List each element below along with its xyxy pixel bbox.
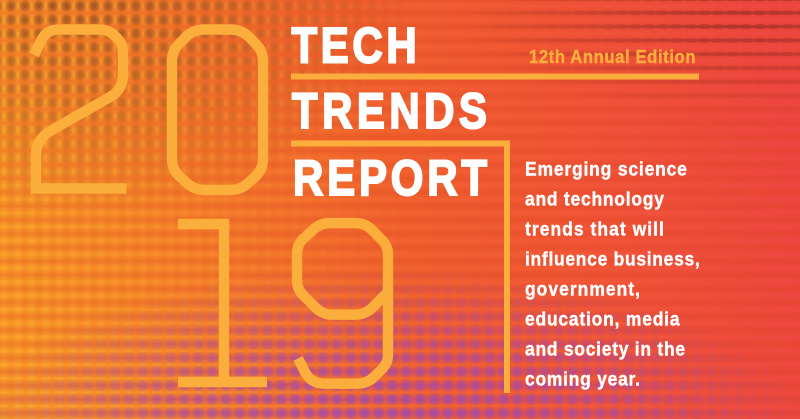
title word: TRENDS: TRENDS [292,83,487,139]
description paragraph: trends that will [525,218,664,240]
title: Tech Trends Report [292,17,487,206]
title word: REPORT: REPORT [293,150,487,206]
description paragraph: education, media [525,308,680,330]
edition label: 12th Annual Edition [529,46,696,67]
numeral 0 [172,30,263,190]
description paragraph: government, [525,278,640,300]
numeral 2 [34,30,126,188]
description paragraph: and technology [525,188,665,210]
description paragraph: and society in the [525,338,685,360]
description paragraph: coming year. [525,368,640,390]
numeral 1 [178,224,267,382]
description paragraph: Emerging science [525,158,687,180]
description paragraph [525,158,700,390]
large year numerals 2019 [34,30,388,384]
rule under TECH with edition line [291,74,699,80]
title word: TECH: TECH [292,17,417,73]
rule and vertical divider [291,140,510,393]
description paragraph: influence business, [525,248,700,270]
numeral 9 [297,223,388,384]
